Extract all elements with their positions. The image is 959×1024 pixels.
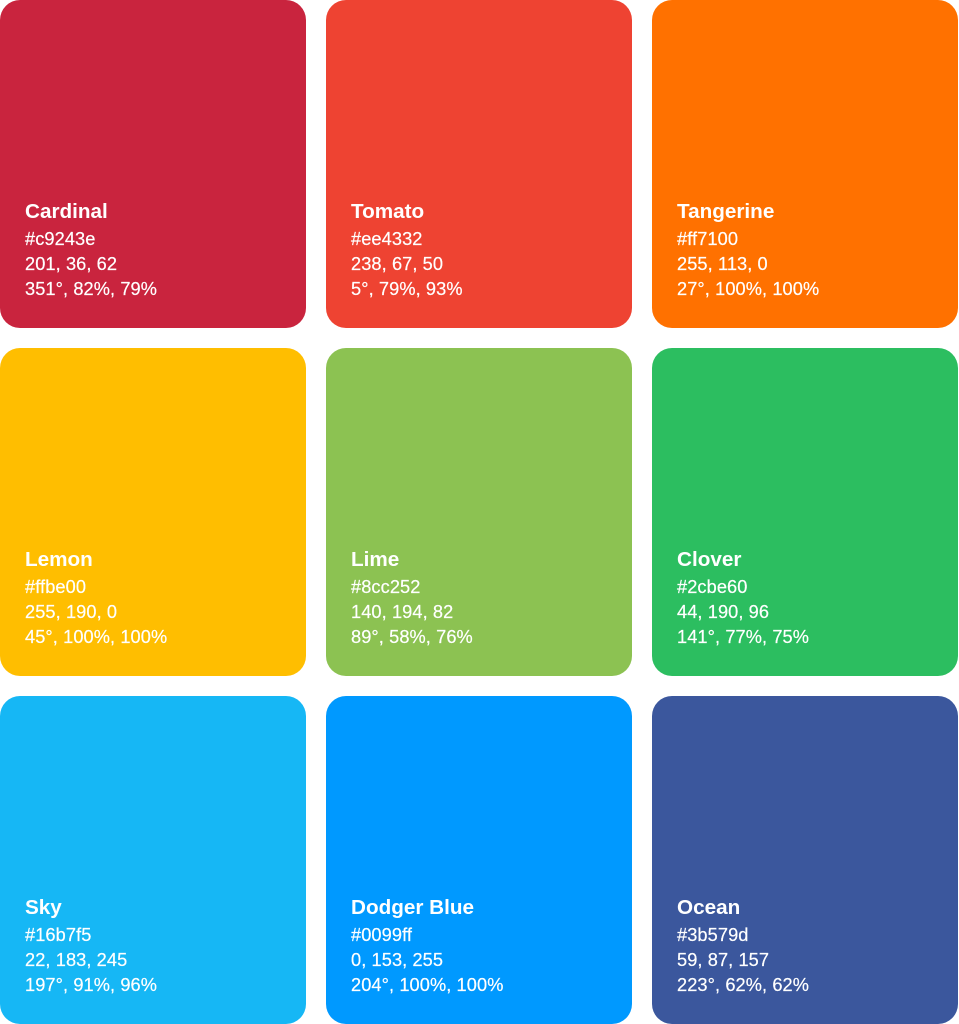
panel: Ocean swatch [652, 696, 958, 1024]
panel: Sky swatch: #16b7f5 [25, 925, 91, 945]
panel: Sky swatch: 197°, 91%, 96% [25, 975, 157, 995]
panel: Dodger Blue swatch: 0, 153, 255 [351, 950, 443, 970]
panel: Cardinal swatch: #c9243e [25, 229, 95, 249]
panel: Clover swatch: 44, 190, 96 [677, 602, 769, 622]
panel: Cardinal swatch: 201, 36, 62 [25, 254, 117, 274]
panel: Sky swatch: Sky [25, 896, 62, 919]
panel: Dodger Blue swatch: Dodger Blue [351, 896, 474, 919]
panel: Sky swatch: 22, 183, 245 [25, 950, 127, 970]
panel: Cardinal swatch [0, 0, 306, 328]
panel: Lemon swatch: 45°, 100%, 100% [25, 627, 167, 647]
panel: Lemon swatch: 255, 190, 0 [25, 602, 117, 622]
panel: Tomato swatch: 5°, 79%, 93% [351, 279, 463, 299]
panel: Tomato swatch: #ee4332 [351, 229, 423, 249]
panel: Tangerine swatch: Tangerine [677, 200, 774, 223]
panel: Clover swatch: 141°, 77%, 75% [677, 627, 809, 647]
panel: Lemon swatch: Lemon [25, 548, 93, 571]
panel: Ocean swatch: Ocean [677, 896, 740, 919]
panel: Ocean swatch: 59, 87, 157 [677, 950, 769, 970]
panel: Ocean swatch: 223°, 62%, 62% [677, 975, 809, 995]
panel: Dodger Blue swatch: 204°, 100%, 100% [351, 975, 503, 995]
panel: Sky swatch [0, 696, 306, 1024]
panel: Clover swatch: #2cbe60 [677, 577, 747, 597]
panel: Tangerine swatch: 255, 113, 0 [677, 254, 768, 274]
panel: Lime swatch: Lime [351, 548, 399, 571]
panel: Lemon swatch: #ffbe00 [25, 577, 86, 597]
panel: Cardinal swatch: 351°, 82%, 79% [25, 279, 157, 299]
panel: Lime swatch: #8cc252 [351, 577, 420, 597]
panel: Lime swatch: 89°, 58%, 76% [351, 627, 473, 647]
panel: Lime swatch: 140, 194, 82 [351, 602, 453, 622]
panel: Lime swatch [326, 348, 632, 676]
panel: Dodger Blue swatch [326, 696, 632, 1024]
panel: Tomato swatch: 238, 67, 50 [351, 254, 443, 274]
panel: Cardinal swatch: Cardinal [25, 200, 108, 223]
panel: Ocean swatch: #3b579d [677, 925, 749, 945]
panel: Tomato swatch: Tomato [351, 200, 424, 223]
panel: Tangerine swatch [652, 0, 958, 328]
panel: Tangerine swatch: #ff7100 [677, 229, 738, 249]
panel: Clover swatch: Clover [677, 548, 741, 571]
panel: Clover swatch [652, 348, 958, 676]
panel: Tangerine swatch: 27°, 100%, 100% [677, 279, 819, 299]
panel: Lemon swatch [0, 348, 306, 676]
panel: Dodger Blue swatch: #0099ff [351, 925, 412, 945]
panel: Tomato swatch [326, 0, 632, 328]
